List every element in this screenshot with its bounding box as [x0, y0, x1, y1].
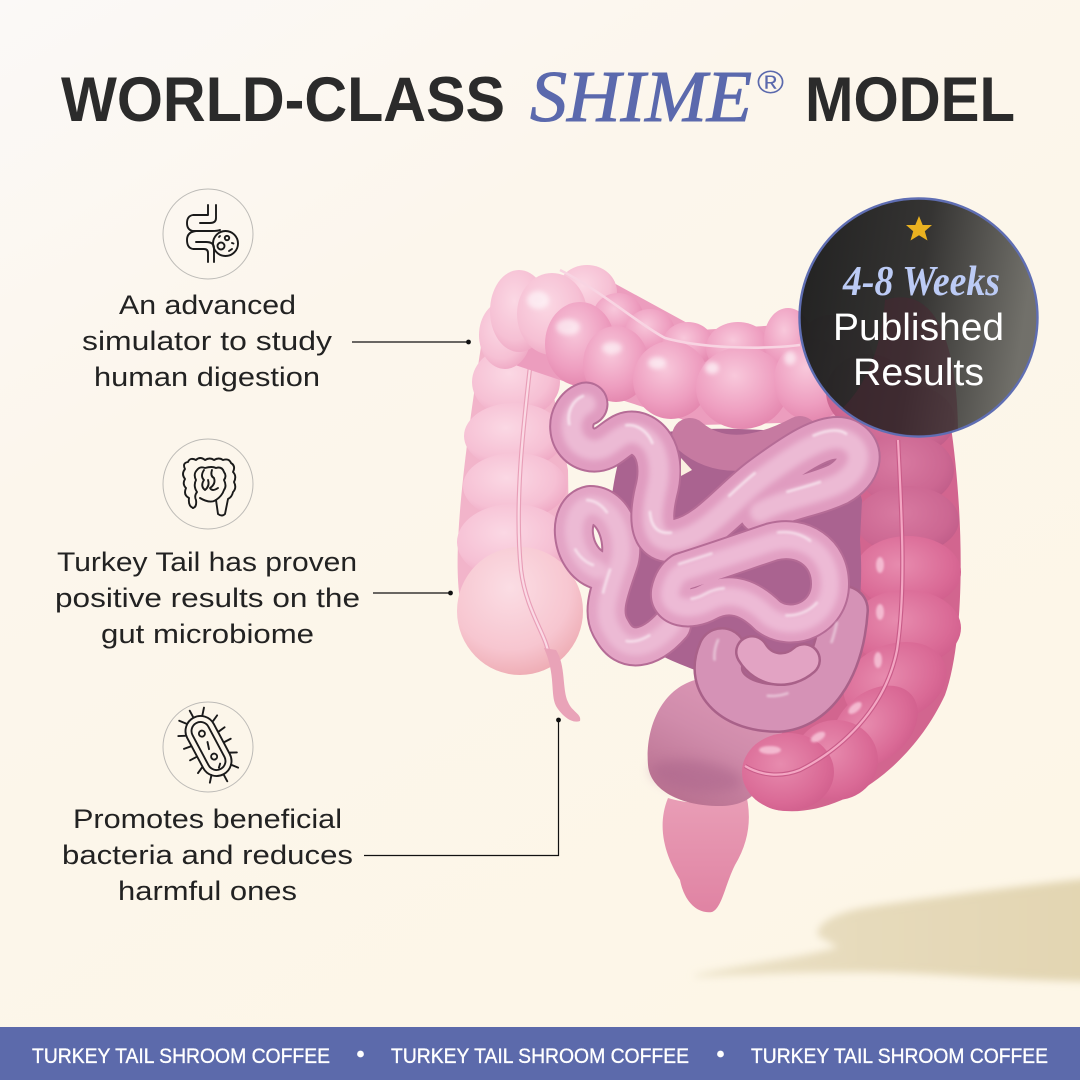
text: beneficial bacteria: bacteria and reduces — [62, 840, 353, 870]
connector line 1 — [352, 340, 471, 344]
title: SHIME — [530, 56, 752, 137]
connector line 3 — [364, 718, 561, 856]
text: beneficial bacteria: harmful ones — [118, 876, 297, 906]
badge: 4-8 weeks published results: Results — [853, 352, 984, 394]
text: advanced simulator: An advanced — [119, 290, 296, 320]
text: beneficial bacteria — [62, 804, 353, 906]
icon: digestive system — [163, 439, 253, 529]
title — [61, 56, 1015, 137]
footer banner — [0, 1027, 1080, 1080]
illustration: digestive tract — [457, 265, 961, 912]
small intestine — [569, 396, 862, 724]
icon: gold star — [906, 216, 932, 240]
icon: intestine with microbe — [163, 189, 253, 279]
badge: 4-8 weeks published results — [800, 198, 1038, 437]
text: advanced simulator — [82, 290, 333, 392]
connector line 2 — [373, 591, 453, 595]
ascending colon and cecum — [457, 340, 583, 675]
text: beneficial bacteria: Promotes beneficial — [73, 804, 342, 834]
descending colon — [742, 384, 961, 811]
text: advanced simulator: human digestion — [94, 362, 320, 392]
text: turkey tail — [55, 547, 360, 649]
ground shadow — [695, 876, 1080, 982]
footer banner: TURKEY TAIL SHROOM COFFEE — [751, 1044, 1048, 1068]
appendix — [544, 648, 580, 722]
footer banner: TURKEY TAIL SHROOM COFFEE — [391, 1044, 689, 1068]
text: turkey tail: positive results on the — [55, 583, 360, 613]
badge: 4-8 weeks published results: Published — [833, 307, 1004, 349]
icon: bacterium — [169, 700, 248, 792]
icon: bacterium ring — [163, 702, 253, 792]
rectum and anal canal — [648, 680, 800, 912]
text: turkey tail: gut microbiome — [101, 619, 314, 649]
title: WORLD-CLASS — [61, 65, 505, 135]
footer banner: TURKEY TAIL SHROOM COFFEE — [32, 1044, 330, 1068]
transverse colon — [479, 265, 910, 430]
title: MODEL — [805, 65, 1015, 135]
badge: 4-8 weeks published results: 4-8 Weeks — [842, 259, 1000, 305]
text: turkey tail: Turkey Tail has proven — [57, 547, 357, 577]
text: advanced simulator: simulator to study — [82, 326, 333, 356]
title: ® — [757, 64, 784, 100]
